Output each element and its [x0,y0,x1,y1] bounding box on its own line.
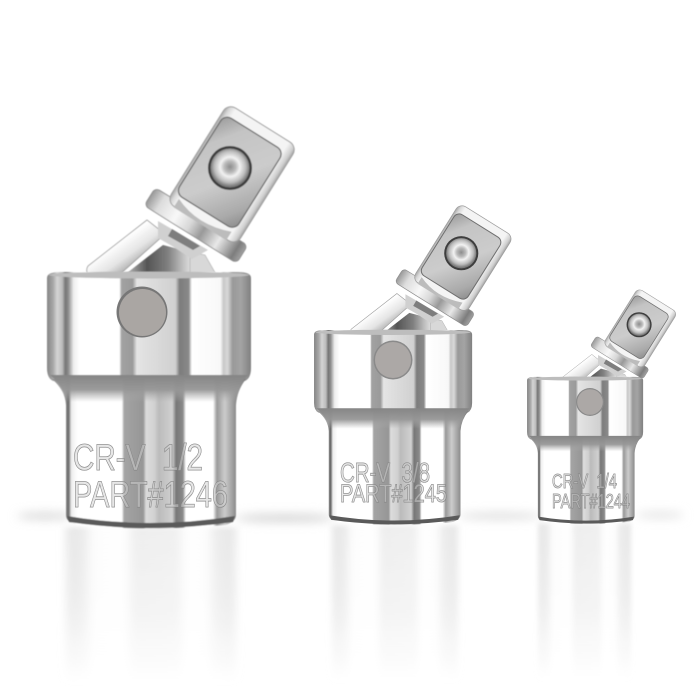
medium 3/8 universal joint socket [314,196,520,525]
small engraving [552,471,630,513]
medium swivel head and square drive [350,196,520,337]
large engraving [73,437,228,515]
small socket body [527,377,643,524]
large retaining button [116,286,168,338]
small swivel head and square drive [557,283,682,386]
medium engraving: CR-V 3/8 [340,457,430,488]
medium retaining button [374,340,412,380]
large socket body [47,272,251,528]
small retaining button [576,388,604,416]
large engraving: CR-V 1/2 [73,437,203,478]
small 1/4 universal joint socket [527,283,682,524]
medium socket body [314,330,472,525]
large swivel head and square drive [87,94,306,276]
floor shadows and reflections [17,512,684,684]
large engraving: PART#1246 [73,474,228,515]
medium engraving [340,457,447,508]
small engraving: CR-V 1/4 [552,471,617,493]
large 1/2 universal joint socket [47,94,306,528]
small engraving: PART#1244 [552,491,630,513]
medium engraving: PART#1245 [340,480,447,508]
